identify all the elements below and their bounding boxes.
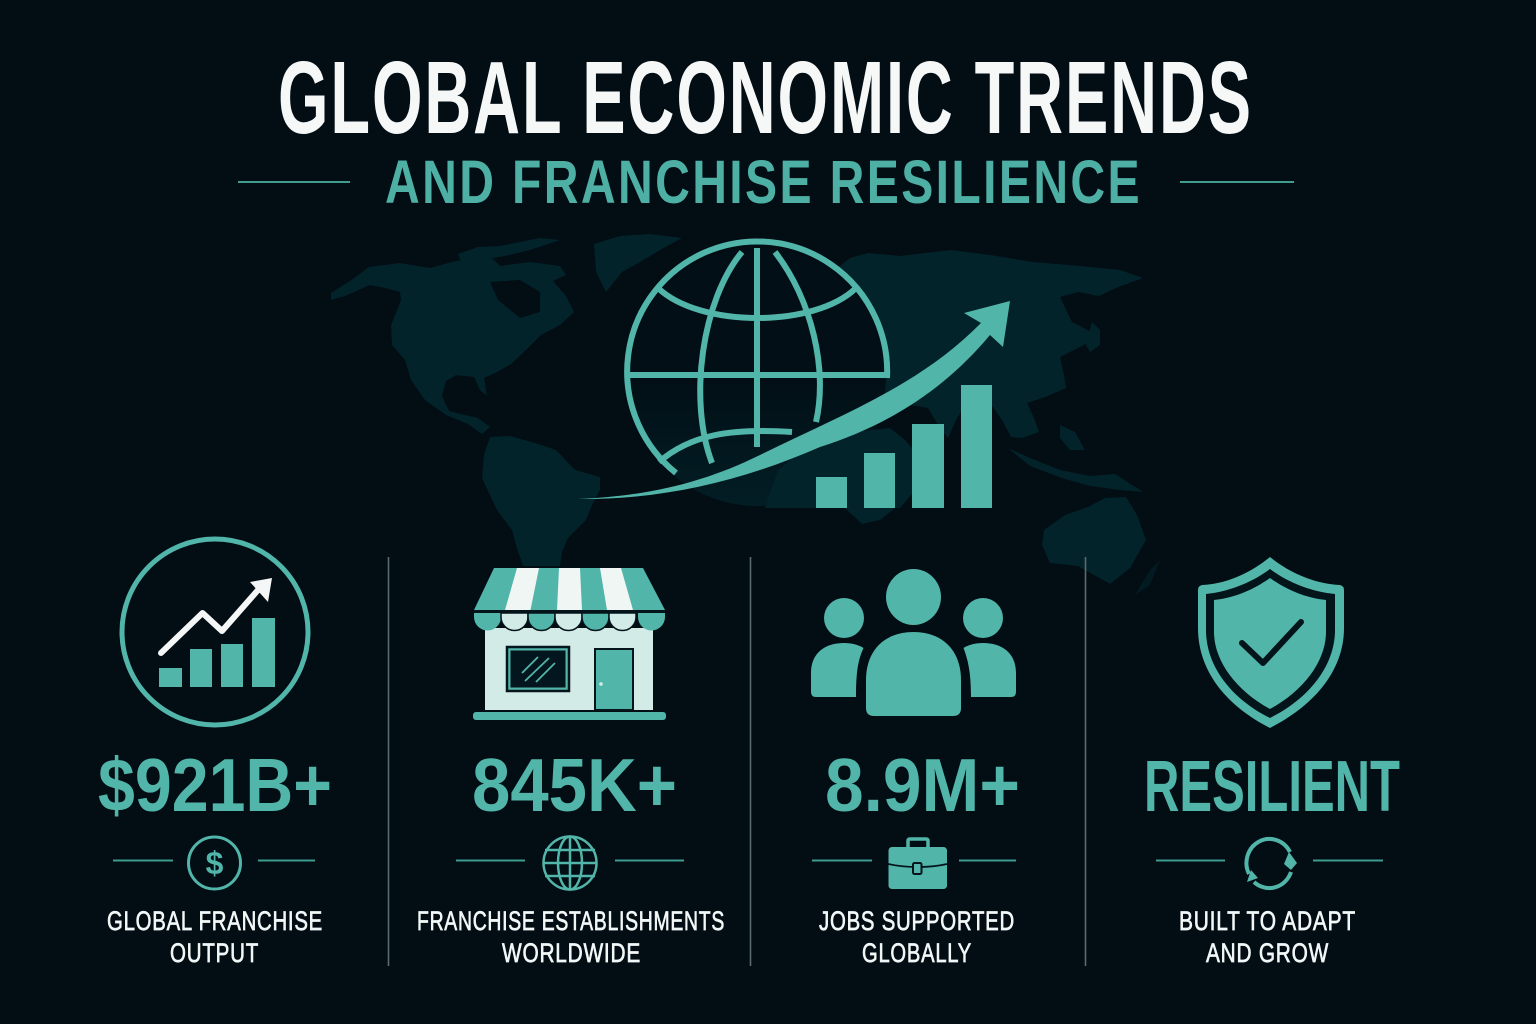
panel: franchise establishments — [417, 568, 725, 968]
stat value: RESILIENT — [1144, 747, 1400, 827]
stat value: 845K+ — [472, 743, 677, 827]
stat value: 8.9M+ — [825, 743, 1020, 827]
icon: shield with check — [1198, 557, 1344, 728]
icon: dollar with rules: $ — [206, 845, 224, 881]
globe disc — [646, 334, 886, 506]
stat label: BUILT TO ADAPT — [1179, 906, 1356, 936]
hudson bay cutout — [490, 280, 540, 318]
stat label — [1179, 906, 1356, 968]
hero globe icon — [627, 241, 887, 473]
africa fragment — [765, 428, 930, 508]
icon: people group — [811, 569, 1016, 716]
panel: jobs supported — [811, 569, 1020, 968]
stat label — [107, 906, 323, 968]
stat label: JOBS SUPPORTED — [819, 906, 1015, 936]
growth arrow — [578, 301, 1010, 499]
stat label — [819, 906, 1015, 968]
dividers — [388, 557, 1086, 966]
icon: briefcase with rules — [812, 839, 1016, 889]
icon: adapt cycle with rules — [1156, 839, 1383, 888]
stat label — [417, 906, 725, 968]
icon: small globe with rules — [456, 836, 684, 890]
icon: storefront — [473, 568, 666, 720]
stat value: $921B+ — [98, 743, 332, 827]
stat label: GLOBALLY — [862, 938, 972, 968]
icon: dollar with rules — [113, 837, 315, 889]
stat label: FRANCHISE ESTABLISHMENTS — [417, 906, 725, 936]
stat label: AND GROW — [1206, 938, 1329, 968]
growth bars — [816, 385, 992, 508]
subtitle with side rules: AND FRANCHISE RESILIENCE — [385, 148, 1142, 216]
panel: resilient — [1144, 557, 1400, 968]
stat label: GLOBAL FRANCHISE — [107, 906, 323, 936]
panel: franchise output — [98, 539, 332, 968]
stat label: OUTPUT — [170, 938, 259, 968]
icon: chart in circle — [122, 539, 308, 725]
world map background — [331, 234, 1160, 595]
stat label: WORLDWIDE — [502, 938, 641, 968]
